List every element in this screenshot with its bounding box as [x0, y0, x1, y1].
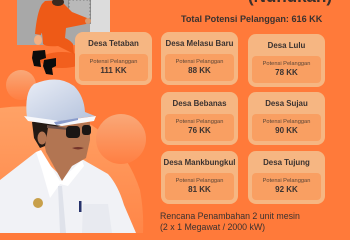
panel: Desa Bebanas: Potensi Pelanggan [176, 119, 223, 125]
panel: Desa Sujau: Desa Sujau [265, 99, 308, 108]
panel: Desa Mankbungkul [161, 151, 238, 204]
panel: Desa Mankbungkul: Potensi Pelanggan [176, 178, 223, 184]
panel: Desa Tetaban [75, 32, 152, 85]
panel: Desa Tetaban: Desa Tetaban [88, 39, 139, 48]
panel: Desa Melasu Baru: 88 KK [188, 66, 211, 75]
large circle [96, 114, 146, 164]
panel: Desa Bebanas: 76 KK [188, 126, 211, 135]
panel: Desa Sujau [248, 92, 325, 145]
panel: Desa Melasu Baru [161, 32, 238, 85]
panel: Desa Mankbungkul: Desa Mankbungkul [164, 158, 235, 167]
panel: Desa Tujung: Desa Tujung [263, 158, 310, 167]
small circle [6, 70, 36, 100]
panel: Desa Melasu Baru: Potensi Pelanggan [176, 59, 223, 65]
panel: Desa Bebanas: Desa Bebanas [173, 99, 226, 108]
icon: worker at panel [17, 0, 110, 75]
panel: Desa Melasu Baru: Desa Melasu Baru [166, 39, 233, 48]
panel: Desa Tujung: 92 KK [275, 185, 298, 194]
panel: Desa Lulu [248, 34, 325, 87]
panel: Desa Bebanas [161, 92, 238, 145]
panel: Desa Sujau: 90 KK [275, 126, 298, 135]
panel: Desa Mankbungkul: 81 KK [188, 185, 211, 194]
footer text: Rencana Penambahan 2 unit mesin [160, 211, 300, 221]
panel: Desa Tujung: Potensi Pelanggan [263, 178, 310, 184]
panel: Desa Lulu: Potensi Pelanggan [263, 61, 310, 67]
footer text [160, 211, 300, 232]
panel: Desa Tetaban: Potensi Pelanggan [90, 59, 137, 65]
large arc behind man [0, 106, 143, 233]
panel: Desa Sujau: Potensi Pelanggan [263, 119, 310, 125]
panel: Desa Tujung [248, 151, 325, 204]
panel: Desa Lulu: Desa Lulu [268, 41, 305, 50]
panel: Desa Tetaban: 111 KK [100, 66, 127, 75]
panel: Desa Lulu: 78 KK [275, 68, 298, 77]
photo: man in white shirt and hard hat [0, 79, 136, 233]
footer text: (2 x 1 Megawat / 2000 kW) [160, 222, 265, 232]
total potential customers heading: Total Potensi Pelanggan: 616 KK [181, 14, 322, 24]
